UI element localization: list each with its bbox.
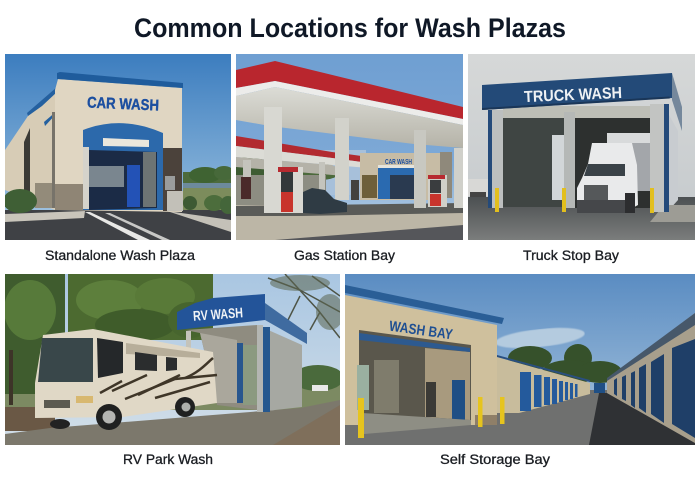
background tree right (268, 274, 340, 338)
panel: rv park wash: RV WASH (193, 304, 243, 324)
fuel pump right (428, 175, 447, 207)
wash bay building (345, 285, 504, 434)
storage row right (607, 313, 695, 443)
trees (4, 274, 213, 405)
title: Common Locations for Wash Plazas (134, 13, 566, 43)
panel: standalone wash plaza: CAR WASH (87, 94, 159, 115)
label: gas station bay: Gas Station Bay (294, 248, 395, 263)
fuel pump left (278, 167, 303, 213)
label: truck stop bay: Truck Stop Bay (523, 248, 619, 263)
bollards (358, 397, 504, 438)
panel: gas station bay (232, 54, 463, 240)
wash bay building: WASH BAY (388, 319, 454, 343)
panel: rv park wash (4, 274, 344, 445)
storage row left (497, 355, 590, 413)
label: self storage bay: Self Storage Bay (440, 452, 550, 467)
panel: standalone wash plaza (3, 54, 236, 240)
panel: truck stop bay (468, 54, 695, 240)
bollards (495, 188, 654, 213)
car (303, 188, 347, 214)
label: standalone wash plaza: Standalone Wash Plaza (45, 248, 196, 263)
motorhome (35, 329, 217, 430)
panel: truck stop bay: TRUCK WASH (524, 85, 622, 106)
panel: gas station bay: CAR WASH (385, 157, 412, 166)
panel: self storage bay (345, 274, 695, 445)
truck (577, 143, 650, 213)
label: rv park wash: RV Park Wash (123, 452, 213, 467)
